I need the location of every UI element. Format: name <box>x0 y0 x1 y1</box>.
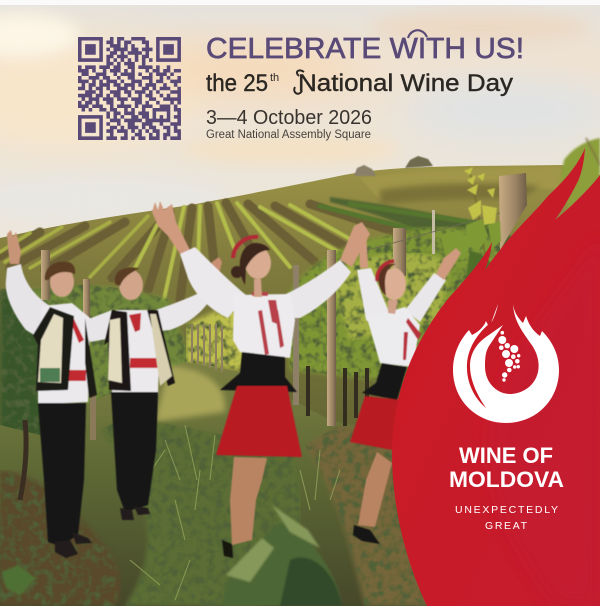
dancer: man left <box>6 230 112 558</box>
subheading: 25th national wine day <box>206 70 513 97</box>
brand text <box>449 443 564 532</box>
brand text: GREAT <box>485 520 528 532</box>
subheading: 25th national wine day: the 25 <box>206 70 268 97</box>
date: 3—4 October 2026 <box>206 106 372 129</box>
heading: celebrate with us: CELEBRATE WITH US! <box>206 33 524 65</box>
brand text: WINE OF <box>459 443 553 468</box>
left dark vines <box>0 289 62 448</box>
venue: Great National Assembly Square <box>206 129 371 141</box>
vest <box>33 307 97 398</box>
grape cluster <box>498 331 520 382</box>
wings and ring <box>453 304 559 423</box>
ground and grass <box>0 362 440 606</box>
subheading: 25th national wine day: National Wine Day <box>298 70 513 97</box>
brand text: MOLDOVA <box>449 467 564 492</box>
wooden posts right <box>293 173 527 426</box>
vineyard rows <box>0 203 490 304</box>
bright vines centre <box>186 300 250 372</box>
climbing vine plant <box>440 167 501 284</box>
red collar tie and sash <box>68 315 86 381</box>
sleeve <box>6 264 50 336</box>
vines behind men <box>30 285 190 410</box>
shoes <box>55 532 92 558</box>
trousers <box>38 403 86 546</box>
bird outline stripe <box>467 320 494 408</box>
red flame <box>392 148 600 606</box>
foreground leaves <box>2 505 342 606</box>
subheading: 25th national wine day: th <box>270 72 279 84</box>
shirt <box>38 303 90 404</box>
QR code <box>78 39 181 138</box>
brand text: UNEXPECTEDLY <box>455 504 558 516</box>
dancer: woman centre <box>152 201 370 558</box>
vines right <box>285 227 505 385</box>
foliage wall behind dancers <box>0 227 505 448</box>
logo: bird and grapes in a drop <box>453 304 559 423</box>
dancer: man centre <box>104 257 222 520</box>
vine trunks and left fence posts <box>20 250 367 500</box>
tree leaves top right <box>560 138 600 215</box>
sky with clouds <box>0 0 600 290</box>
raised hand <box>7 230 21 264</box>
face and hair <box>50 267 74 297</box>
dancer: woman right <box>350 228 461 544</box>
hilltop trees <box>354 156 433 176</box>
distant hill with vineyard <box>0 165 600 460</box>
